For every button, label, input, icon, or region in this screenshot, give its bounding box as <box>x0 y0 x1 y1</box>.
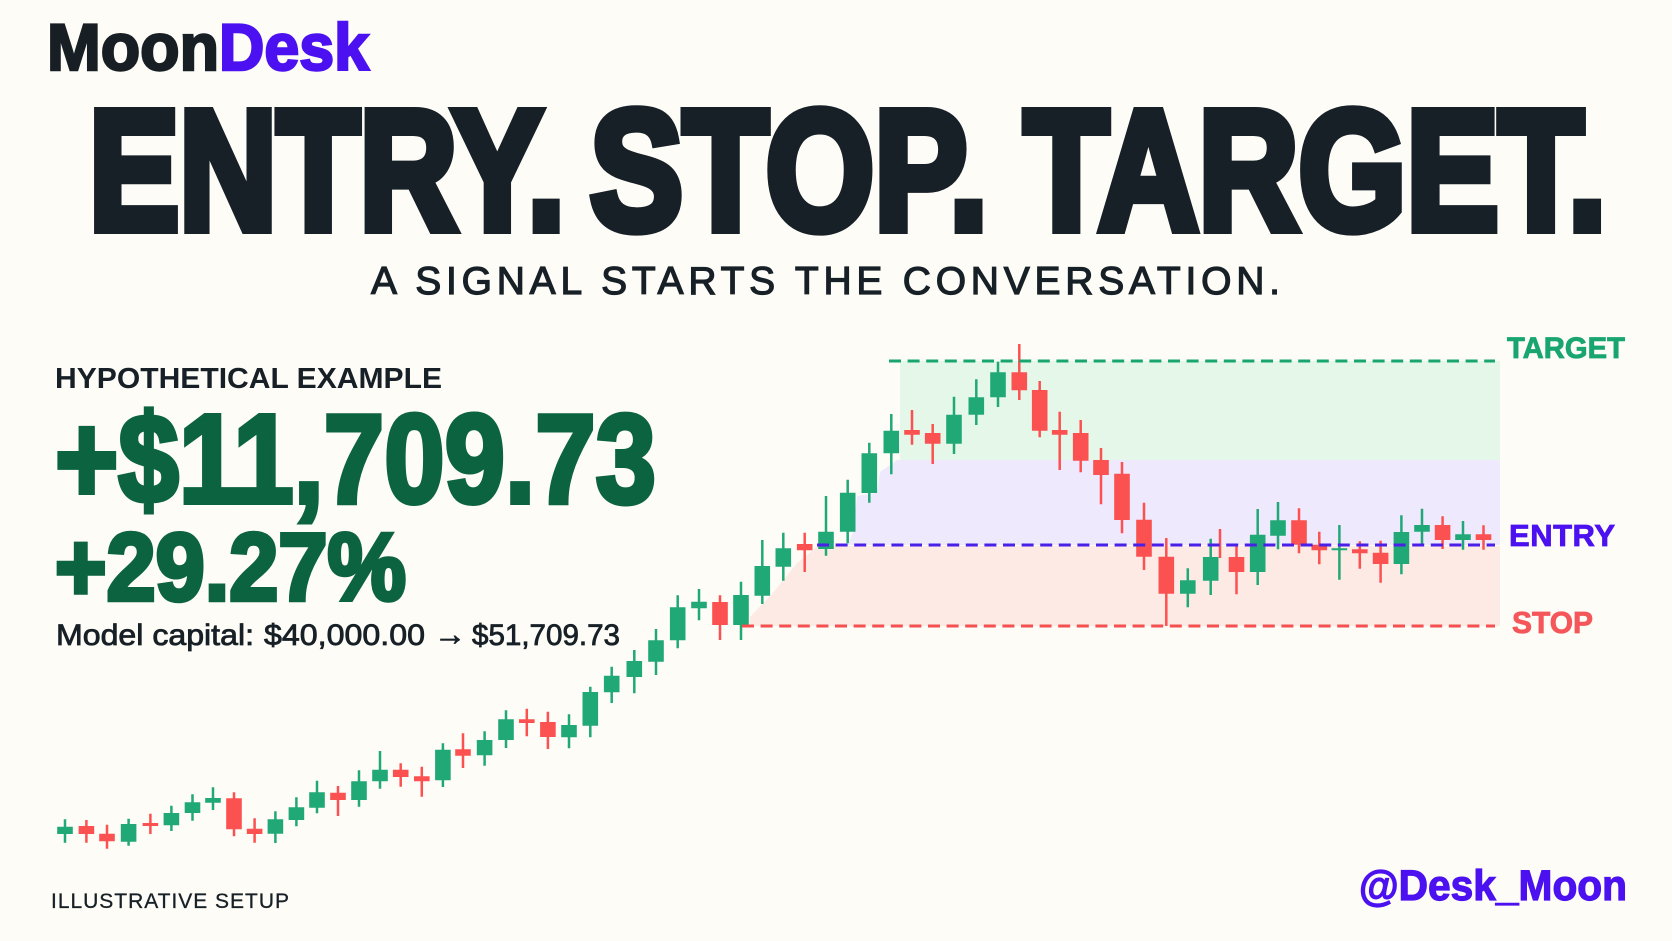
title: STOP. <box>590 76 988 266</box>
zone: target <box>900 361 1500 460</box>
target line <box>889 360 1495 362</box>
model capital line <box>56 616 620 652</box>
red candles <box>86 344 1483 849</box>
panel: trade zones <box>750 361 1500 626</box>
logo: MoonDesk: Moon <box>47 10 219 84</box>
panel: hypothetical result <box>55 363 656 652</box>
profit percent: +29.27% <box>55 514 406 621</box>
model capital line: Model capital: <box>56 619 254 652</box>
logo: MoonDesk <box>47 10 369 84</box>
label: target: TARGET <box>1507 332 1625 365</box>
subtitle: A SIGNAL STARTS THE CONVERSATION. <box>371 260 1280 303</box>
footnote: illustrative setup: ILLUSTRATIVE SETUP <box>51 890 289 913</box>
logo: MoonDesk: Desk <box>219 10 369 84</box>
label: stop: STOP <box>1512 605 1593 640</box>
zone: entry to target <box>848 460 1500 545</box>
profit amount: +$11,709.73 <box>55 388 656 530</box>
model capital line: $40,000.00 <box>264 619 425 652</box>
model capital line: → <box>434 616 466 652</box>
label: entry: ENTRY <box>1509 518 1615 553</box>
stop line <box>742 624 1495 628</box>
entry line <box>817 544 1495 546</box>
title <box>89 76 1606 266</box>
candlestick chart <box>65 344 1484 849</box>
model capital line: $51,709.73 <box>472 619 620 652</box>
social handle: @Desk_Moon <box>1359 862 1627 910</box>
title: ENTRY. <box>89 76 565 266</box>
label: hypothetical example: HYPOTHETICAL EXAMPLE <box>55 363 442 395</box>
zone: stop <box>750 546 1500 626</box>
green candles <box>65 362 1463 846</box>
